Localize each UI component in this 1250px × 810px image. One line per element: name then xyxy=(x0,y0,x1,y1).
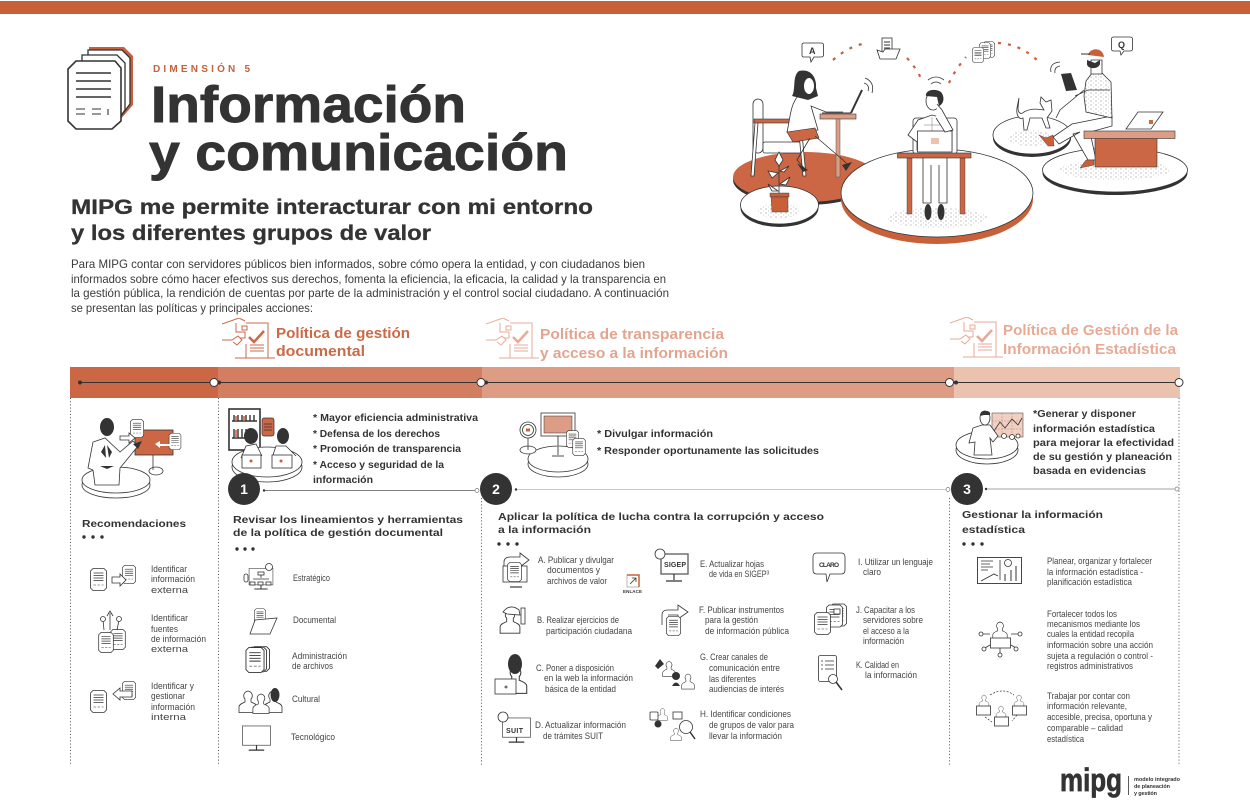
item: internal information: gestionar xyxy=(151,691,185,702)
label: archive: Administración xyxy=(292,651,347,662)
heading: step 1 xyxy=(233,515,464,539)
item: external information: Identificar xyxy=(151,564,187,575)
text: records: información sobre una acción xyxy=(1047,640,1153,651)
panel: gestión documental xyxy=(228,409,478,750)
item I text xyxy=(858,557,933,578)
platform: plant xyxy=(740,186,818,227)
step badge 3: 3 xyxy=(963,481,971,497)
item: external sources xyxy=(151,613,206,655)
item: external information xyxy=(151,564,195,596)
text: quality: Trabajar por contar con xyxy=(1047,691,1130,702)
item B text: participación ciudadana xyxy=(546,626,633,637)
policy header 2 xyxy=(486,318,728,362)
heading: step 3: Gestionar la información xyxy=(962,510,1103,521)
label: archive: de archivos xyxy=(292,661,333,672)
item D icon: SUIT: SUIT xyxy=(506,728,524,735)
item A text: documentos y xyxy=(547,565,600,576)
policy header 3 xyxy=(950,317,1179,358)
text: quality: información relevante, xyxy=(1047,701,1127,712)
benefit text: de su gestión y planeación xyxy=(1033,452,1172,463)
item J icon xyxy=(814,604,846,634)
icon: technology monitor xyxy=(242,726,271,750)
item E icon: SIGEP: SIGEP xyxy=(664,562,686,569)
benefit text: información estadística xyxy=(1033,424,1155,435)
text: records: registros administrativos xyxy=(1047,661,1133,672)
subtitle: MIPG me permite interacturar con mi entorno xyxy=(71,195,593,219)
step 2 connector xyxy=(515,488,950,492)
label: archive xyxy=(292,651,347,672)
heading: step 2 xyxy=(498,512,824,536)
item G text: comunicación entre xyxy=(709,663,780,674)
text: quality xyxy=(1047,691,1152,745)
top bar xyxy=(0,1,1250,14)
item A icon xyxy=(503,553,529,587)
item J text: J. Capacitar a los xyxy=(856,605,915,616)
platform: orange xyxy=(733,152,877,205)
item K text: la información xyxy=(865,670,917,681)
logo: mipg xyxy=(1060,762,1181,798)
heading: step 2: a la información xyxy=(498,525,591,536)
logo: mipg: de planeación xyxy=(1134,784,1171,790)
text: planning xyxy=(1047,556,1152,588)
icon: folder xyxy=(877,38,900,59)
item: internal information xyxy=(151,681,195,723)
benefits list: * Divulgar información xyxy=(597,429,713,440)
item K text xyxy=(856,660,917,681)
item C text: en la web la información xyxy=(544,673,633,684)
eyebrow: dimension: DIMENSIÓN 5 xyxy=(153,62,250,75)
title: Información xyxy=(151,76,466,133)
icon: culture people xyxy=(239,688,282,713)
item G text: G. Crear canales de xyxy=(700,652,768,663)
title xyxy=(149,76,568,181)
intro paragraph: la gestión pública, la rendición de cuentas por parte de la administración y el control social ciudadano. A continuación xyxy=(71,286,669,300)
panel: información estadística xyxy=(951,409,1174,745)
item G text: audiencias de interés xyxy=(709,684,784,695)
title: y comunicación xyxy=(149,124,568,181)
benefit text: basada en evidencias xyxy=(1033,466,1146,477)
item G text xyxy=(700,652,784,695)
plant xyxy=(768,152,790,212)
panel: transparencia xyxy=(480,413,933,742)
policy header 3: Política de Gestión de la xyxy=(1003,323,1179,339)
scene: archive office xyxy=(229,409,302,482)
item I text: claro xyxy=(863,567,881,578)
platform: center xyxy=(841,149,1033,244)
item C text: C. Poner a disposición xyxy=(536,663,614,674)
logo: mipg: y gestión xyxy=(1134,791,1158,797)
step badge 2: 2 xyxy=(492,481,500,497)
text: planning: Planear, organizar y fortalecer xyxy=(1047,556,1152,567)
illustration: people exchanging information xyxy=(733,37,1188,244)
dots xyxy=(962,542,984,546)
speech bubble A: A xyxy=(809,46,816,56)
item F text xyxy=(699,605,790,637)
panel: recomendaciones xyxy=(82,418,206,723)
item H text: llevar la información xyxy=(709,731,782,742)
item A text: archivos de valor xyxy=(547,576,607,587)
text: records xyxy=(1047,609,1153,672)
icon: internal information xyxy=(90,681,136,712)
benefit text xyxy=(1033,409,1174,477)
text: planning: la información estadística - xyxy=(1047,567,1143,578)
step badge 1 xyxy=(228,473,260,505)
benefits list: * Promoción de transparencia xyxy=(313,444,461,455)
icon: documental xyxy=(250,609,277,634)
text: quality: comparable – calidad xyxy=(1047,723,1123,734)
item: external information: información xyxy=(151,574,195,585)
step 3 connector xyxy=(985,487,1179,491)
icon: enlace link: ENLACE xyxy=(623,589,642,594)
item: external sources: externa xyxy=(151,644,189,655)
text: records: Fortalecer todos los xyxy=(1047,609,1117,620)
item: internal information: información xyxy=(151,702,195,713)
scene: analyst and chart xyxy=(956,411,1023,464)
item G text: las diferentes xyxy=(709,674,756,685)
item B text: B. Realizar ejercicios de xyxy=(537,615,619,626)
dog xyxy=(1017,97,1052,130)
item E text xyxy=(700,559,769,580)
item J text xyxy=(856,605,923,647)
item I icon: CLARO bubble xyxy=(813,553,845,582)
woman at laptop xyxy=(751,70,862,177)
item: external sources: Identificar xyxy=(151,613,188,624)
item H text: H. Identificar condiciones xyxy=(700,709,791,720)
heading: step 1: Revisar los lineamientos y herramientas xyxy=(233,515,464,526)
step badge 1: 1 xyxy=(240,481,248,497)
intro paragraph: se presentan las políticas y principales acciones: xyxy=(71,301,313,315)
icon: document stack xyxy=(68,47,133,129)
subtitle xyxy=(71,195,593,245)
item J text: servidores sobre xyxy=(863,615,923,626)
logo: mipg: modelo integrado xyxy=(1134,777,1181,783)
policy header 1: documental xyxy=(276,344,365,360)
item D icon: SUIT xyxy=(498,712,531,742)
item D text xyxy=(535,720,626,742)
item F text: para la gestión xyxy=(705,615,758,626)
icon: documents xyxy=(972,42,995,63)
icon: records network xyxy=(979,622,1022,657)
policy header 2: y acceso a la información xyxy=(540,346,728,362)
benefits list: * Responder oportunamente las solicitudes xyxy=(597,446,819,457)
item I text: I. Utilizar un lenguaje xyxy=(858,557,933,568)
dotted exchange arcs xyxy=(833,43,1041,83)
text: records: cuales la entidad recopila xyxy=(1047,629,1135,640)
speech bubble A xyxy=(802,43,824,62)
intro paragraph xyxy=(71,257,669,315)
platform: right xyxy=(1042,148,1188,195)
item B text xyxy=(537,615,633,637)
wifi signals xyxy=(864,62,1060,93)
item K text: K. Calidad en xyxy=(856,660,899,671)
step badge 3 xyxy=(951,473,983,505)
item H icon xyxy=(650,708,695,741)
speech bubble Q: Q xyxy=(1118,40,1125,50)
item: external information: externa xyxy=(151,585,189,596)
icon: strategic xyxy=(244,564,273,589)
heading: recomendaciones: Recomendaciones xyxy=(82,519,187,530)
item: internal information: interna xyxy=(151,712,187,723)
benefit text: para mejorar la efectividad xyxy=(1033,438,1174,449)
item H text xyxy=(700,709,795,742)
heading: step 1: de la política de gestión documental xyxy=(233,528,443,539)
item A text xyxy=(538,555,614,587)
text: records: sujeta a regulación o control - xyxy=(1047,651,1153,662)
item J text: información xyxy=(863,636,904,647)
item D text: de trámites SUIT xyxy=(543,731,603,742)
man with phone at desk xyxy=(898,90,971,220)
item H text: de grupos de valor para xyxy=(709,720,795,731)
icon: quality team xyxy=(976,691,1026,726)
label: documental: Documental xyxy=(293,615,336,626)
man with tablet xyxy=(1039,49,1112,168)
item B icon xyxy=(500,607,525,633)
icon: planning dashboard xyxy=(978,558,1022,584)
item D text: D. Actualizar información xyxy=(535,720,626,731)
logo: mipg: mipg xyxy=(1060,762,1122,798)
speech bubble Q xyxy=(1112,37,1132,55)
dots xyxy=(235,547,255,551)
policy header 1: Política de gestión xyxy=(276,326,410,342)
item I icon: CLARO bubble: CLARO xyxy=(819,562,839,569)
item F icon xyxy=(662,605,688,636)
icon: enlace link xyxy=(623,575,642,594)
right desk with laptop xyxy=(1084,112,1175,167)
heading: step 3 xyxy=(962,510,1103,536)
item C icon xyxy=(495,654,527,694)
platform: dog xyxy=(993,116,1071,157)
benefits list: * Acceso y seguridad de la xyxy=(313,460,444,471)
benefits list xyxy=(597,429,819,457)
item E text: de vida en SIGEP³ xyxy=(709,569,769,580)
item: internal information: Identificar y xyxy=(151,681,194,692)
benefits list: información xyxy=(313,475,373,486)
icon: external sources xyxy=(99,611,125,653)
text: records: mecanismos mediante los xyxy=(1047,619,1140,630)
label: cultural: Cultural xyxy=(292,694,320,705)
dots xyxy=(497,542,519,546)
text: planning: planificación estadística xyxy=(1047,577,1133,588)
policy header 1 xyxy=(222,318,410,360)
item A text: A. Publicar y divulgar xyxy=(538,555,614,566)
timeline band xyxy=(70,367,1183,398)
intro paragraph: Para MIPG contar con servidores públicos bien informados, sobre cómo opera la entidad, y con ciudadanos bien xyxy=(71,257,645,271)
benefits list: * Mayor eficiencia administrativa xyxy=(313,413,478,424)
step 1 connector xyxy=(263,488,479,492)
icon: archive stack xyxy=(246,647,269,672)
item: external sources: fuentes xyxy=(151,624,178,635)
heading: step 3: estadística xyxy=(962,525,1026,536)
scene: presenter xyxy=(82,418,181,498)
item C text: básica de la entidad xyxy=(545,684,616,695)
item E icon: SIGEP xyxy=(655,549,688,581)
label: strategic: Estratégico xyxy=(293,573,330,584)
text: quality: accesible, precisa, oportuna y xyxy=(1047,712,1152,723)
intro paragraph: informados sobre cómo hacer efectivos sus derechos, fomenta la eficiencia, la eficacia, la calidad y la transparencia en xyxy=(71,272,666,286)
label: technology: Tecnológico xyxy=(291,732,335,743)
policy header 2: Política de transparencia xyxy=(540,327,725,343)
item F text: de información pública xyxy=(705,626,790,637)
item G icon xyxy=(655,659,694,689)
step badge 2 xyxy=(480,473,512,505)
benefits list: * Defensa de los derechos xyxy=(313,429,440,440)
benefits list xyxy=(313,413,478,486)
scene: public display xyxy=(520,413,588,477)
item: external sources: de información xyxy=(151,634,206,645)
item K icon xyxy=(818,656,842,690)
dots xyxy=(82,535,104,539)
icon: external information xyxy=(90,565,136,590)
item C text xyxy=(536,663,633,695)
subtitle: y los diferentes grupos de valor xyxy=(71,221,432,245)
item E text: E. Actualizar hojas xyxy=(700,559,764,570)
benefit text: *Generar y disponer xyxy=(1033,409,1136,420)
text: quality: estadística xyxy=(1047,734,1085,745)
item J text: el acceso a la xyxy=(863,626,910,637)
heading: step 2: Aplicar la política de lucha contra la corrupción y acceso xyxy=(498,512,824,523)
item F text: F. Publicar instrumentos xyxy=(699,605,784,616)
policy header 3: Información Estadística xyxy=(1003,342,1177,358)
